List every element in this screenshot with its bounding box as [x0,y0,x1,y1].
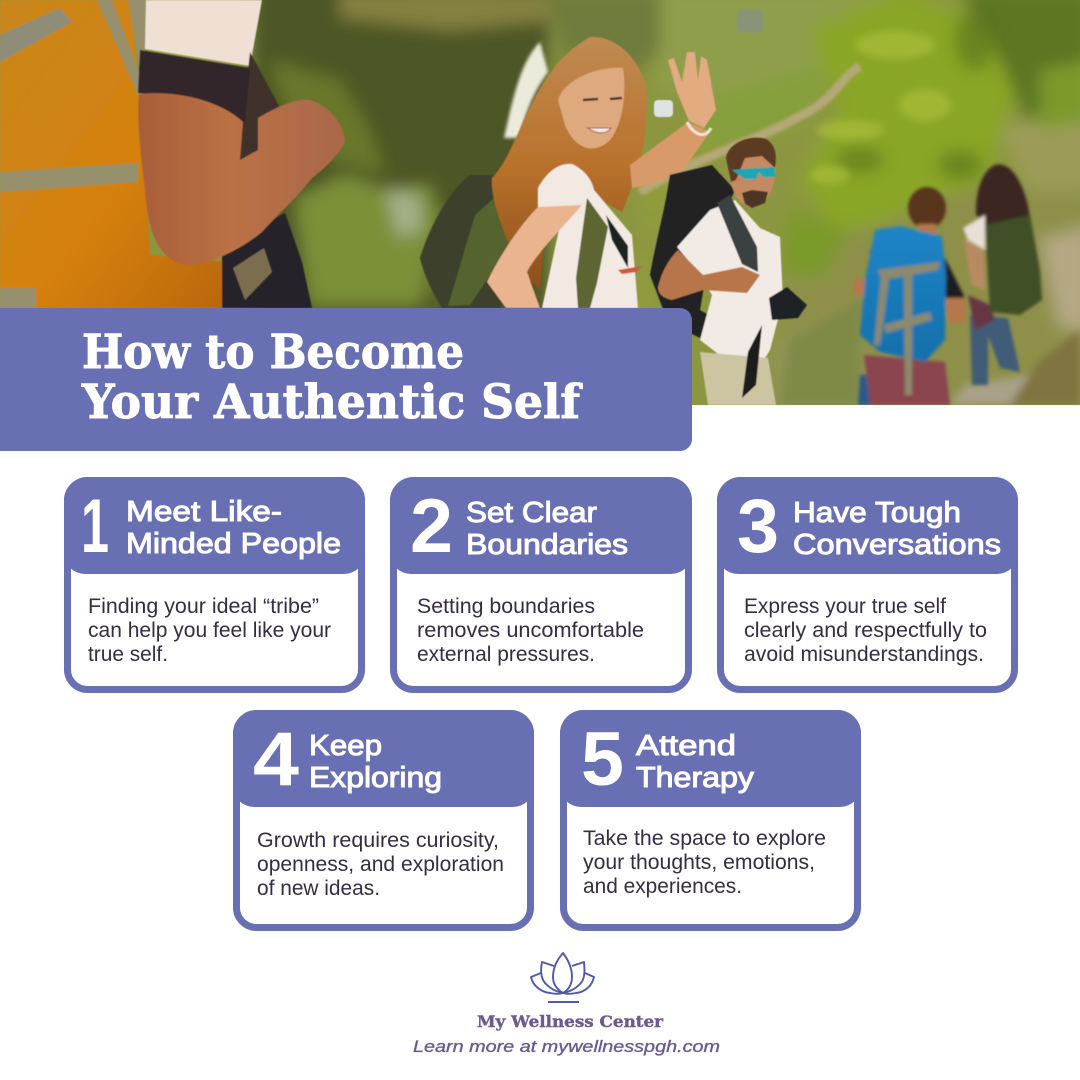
red buckle [618,266,642,274]
number 5: 5 [581,717,624,802]
title text: How to Become [82,325,464,380]
card 2 heading [466,497,628,561]
distant slope shading [780,300,1080,405]
long dark hair [976,164,1030,225]
card 5 body: your thoughts, emotions, [583,851,815,874]
card 2: Set Clear Boundaries [390,477,692,690]
card 1 header [64,477,365,574]
hiker with green backpack [963,164,1042,385]
icon: lotus logo [531,953,594,1002]
arm [964,238,985,290]
tree shadow patches [836,10,995,179]
arms [852,278,966,325]
card 3 body: clearly and respectfully to [744,619,987,642]
beige trousers [700,352,776,405]
card 4: Keep Exploring [233,710,534,928]
card 5 body: Take the space to explore [583,827,826,850]
card 1 body: true self. [88,643,168,666]
card 5 heading [636,730,755,794]
hiker with blue backpack [852,187,966,405]
photo background: forest and hillside [0,0,1080,430]
card 1 heading [126,496,341,560]
distant vehicle [737,10,763,32]
bracelet [687,122,711,135]
arm waving [630,122,710,188]
raised hand [668,52,716,128]
card 2 header [390,477,692,574]
pack harness strap [717,195,758,272]
card 3 heading [793,497,1001,561]
white t-shirt [676,200,784,358]
card 5 body: and experiences. [583,875,742,898]
card 5 heading: Therapy [636,762,755,794]
title banner [0,308,692,451]
hiker in the middle: smiling man with camera [650,138,807,405]
card 4 heading [309,730,442,794]
card 4 body: Growth requires curiosity, [257,829,499,852]
orange backpack [0,0,232,308]
number 4: 4 [253,717,299,802]
dark strap behind hand [240,52,280,160]
card 4 body: of new ideas. [257,877,380,900]
plaid at waist [968,295,995,330]
parked white car [654,100,673,117]
card 2 heading: Boundaries [466,529,628,561]
black backpack [649,164,734,338]
dark sleeves [870,250,965,300]
card 5 heading: Attend [636,730,736,762]
card 1 heading: Meet Like- [126,496,282,528]
title text: Your Authentic Self [81,375,583,430]
plaid shirt tied at waist [864,355,950,405]
card 2 body: external pressures. [417,643,595,666]
hair [726,138,776,182]
number 2: 2 [410,484,453,569]
eyes and smile [583,98,622,133]
card 3 heading: Conversations [793,529,1001,561]
camera [769,287,807,320]
card 5: Attend Therapy [560,710,861,928]
card 4 heading: Exploring [309,762,442,794]
bare arm on hip [487,205,582,308]
jeans [858,375,880,405]
number 3: 3 [737,484,779,569]
beard [742,190,768,208]
number 1: 1 [81,484,109,569]
card 1 heading: Minded People [126,528,341,560]
card 2 body: Setting boundaries [417,595,595,618]
face [558,68,624,148]
neck [918,224,936,236]
card 2 body: removes uncomfortable [417,619,644,642]
jeans [970,315,1020,385]
dark pack at his side [222,213,312,308]
card 1 body [88,595,331,666]
winding dirt road [640,66,860,192]
card 3 body [744,595,987,666]
card 4 body: openness, and exploration [257,853,504,876]
card 3: Have Tough Conversations [717,477,1018,690]
muscular arm [138,93,345,265]
card 3 header [717,477,1018,574]
pack straps [874,262,940,395]
card 5 body [583,827,826,898]
card 4 heading: Keep [309,730,382,762]
card 3 heading: Have Tough [793,497,961,529]
card 5 header [560,710,861,807]
backpack green panel [448,198,509,306]
footer link text: Learn more at mywellnesspgh.com [413,1037,720,1056]
card 3 body: Express your true self [744,595,946,618]
card 1: Meet Like-Minded People [64,477,365,690]
blue backpack [860,226,946,362]
hanging strap [742,325,762,398]
mirrored sunglasses [732,167,775,179]
card 4 body [257,829,504,900]
dark sleeve [138,50,250,122]
sunlit foliage highlights [810,31,951,184]
foreground hiker: arm and orange backpack [0,0,345,308]
card 2 body [417,595,644,666]
head [908,187,946,229]
card 1 body: Finding your ideal “tribe” [88,595,319,618]
green shoulder strap [576,198,608,308]
title text [81,325,583,430]
long auburn hair [492,37,647,290]
green backpack [985,215,1042,315]
white shirt [145,0,262,66]
hiker in front: waving woman [420,37,716,308]
logo wordmark: My Wellness Center [477,1012,664,1031]
head [728,156,776,208]
forearm [658,250,760,300]
card 1 body: can help you feel like your [88,619,331,642]
white shirt sleeve [963,215,985,250]
river highlight [504,42,548,138]
backpack straps [0,0,146,308]
card 3 body: avoid misunderstandings. [744,643,984,666]
hero photo: hikers on a hillside [0,0,1080,430]
shirt [538,164,638,308]
card 4 header [233,710,534,807]
card 2 heading: Set Clear [466,497,598,529]
black strap [606,215,628,268]
green backpack [420,175,503,308]
